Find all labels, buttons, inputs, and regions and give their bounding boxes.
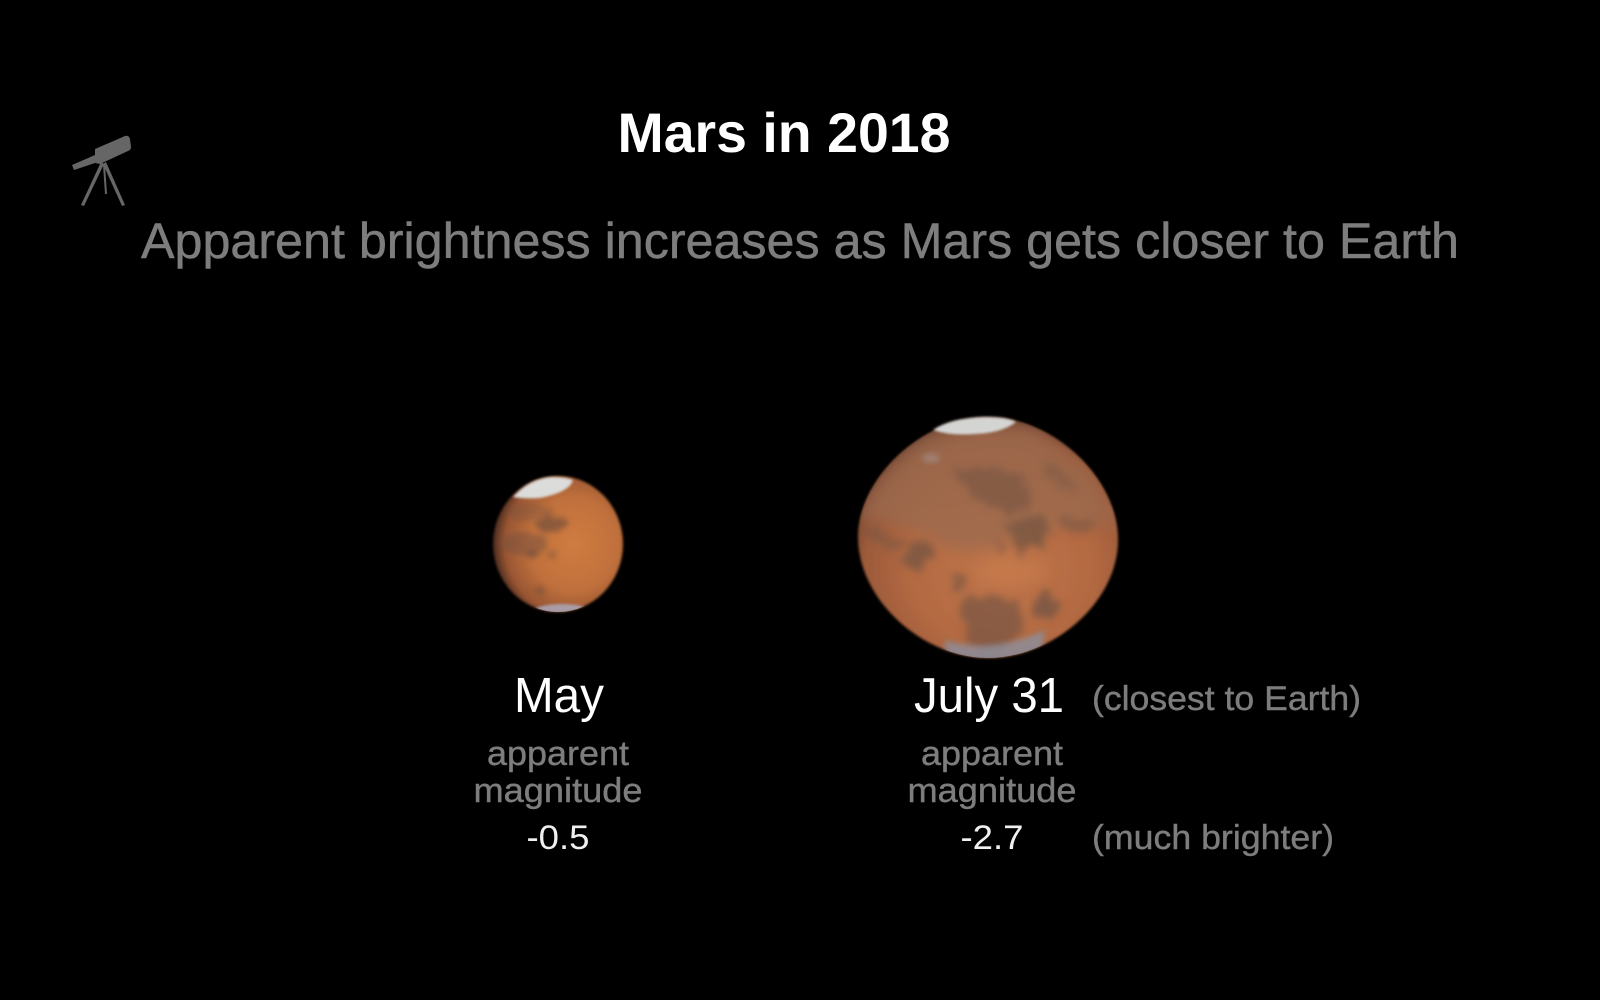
bright equatorial zone, July [976, 560, 1048, 584]
limb glow, May [534, 602, 586, 612]
label: May apparent magnitude [474, 735, 642, 810]
subtitle: Apparent brightness increases as Mars gets closer to Earth [141, 213, 1459, 269]
note: much brighter: (much brighter) [1092, 819, 1334, 857]
label: July apparent magnitude: magnitude [908, 772, 1076, 810]
pale smudge, July [922, 453, 940, 463]
polar cap, May [513, 477, 573, 498]
pale northern haze, July [855, 425, 1120, 551]
limb glow, July [942, 628, 1048, 658]
label: July 31: July 31 [914, 669, 1064, 723]
note: closest to Earth: (closest to Earth) [1092, 680, 1361, 718]
title: Mars in 2018 [618, 101, 950, 164]
label: May apparent magnitude: magnitude [474, 772, 642, 810]
label: May apparent magnitude: apparent [487, 735, 630, 773]
label: July apparent magnitude [908, 735, 1076, 810]
dark surface markings, May [500, 503, 568, 598]
planet: Mars in May [493, 476, 623, 620]
planet: Mars on July 31 [855, 417, 1120, 665]
polar cap, July [933, 417, 1016, 434]
value: May magnitude: -0.5 [526, 819, 590, 857]
label: May: May [514, 669, 604, 723]
label: July apparent magnitude: apparent [921, 735, 1064, 773]
value: July magnitude: -2.7 [960, 819, 1024, 857]
dark surface markings, July [864, 460, 1098, 660]
icon: telescope [72, 136, 131, 206]
